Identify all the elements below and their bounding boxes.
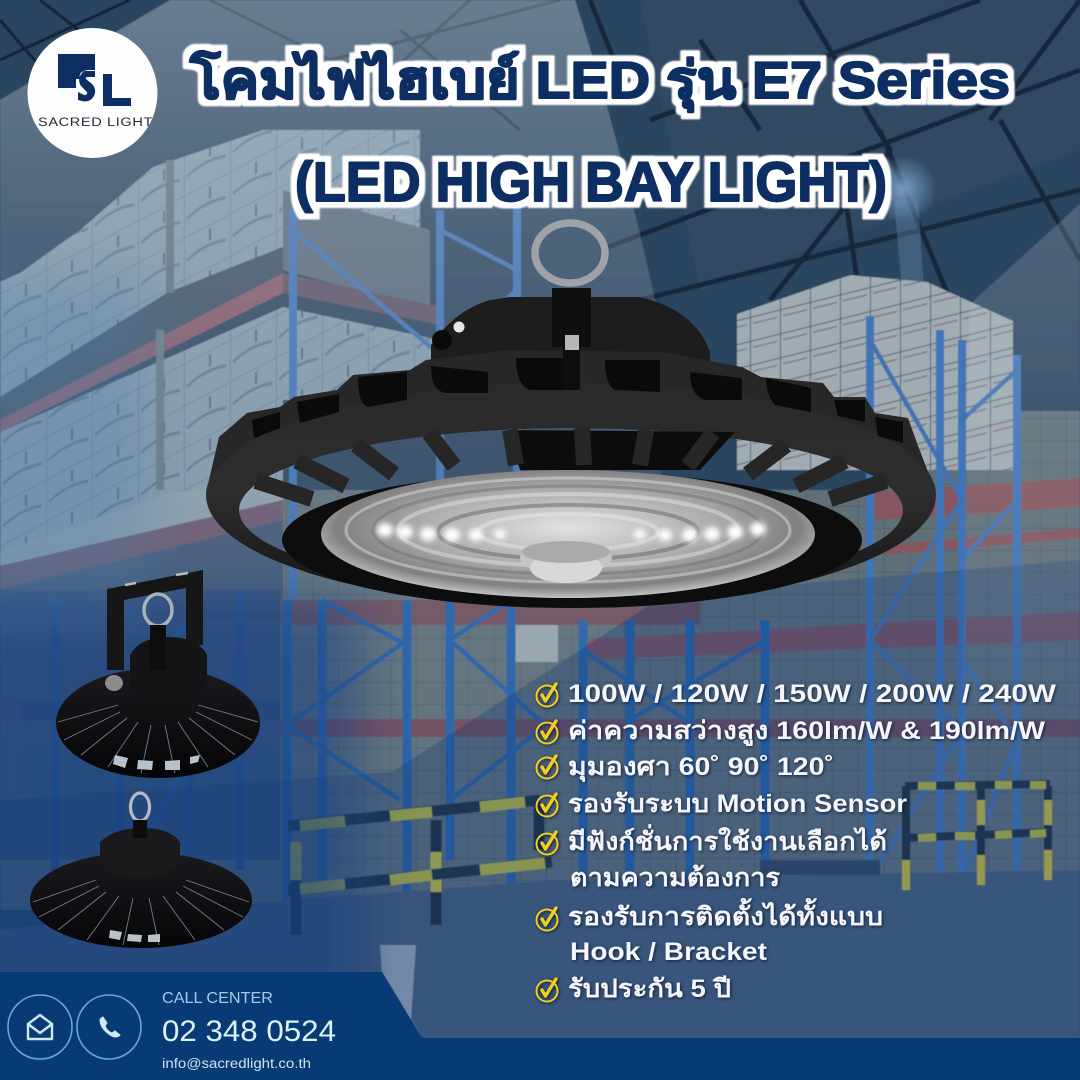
finned disc	[56, 668, 260, 778]
feature: dimming: ตามความต้องการ	[570, 864, 781, 892]
cooling fin lines	[33, 880, 249, 945]
blue rack uprights lower	[55, 590, 765, 930]
rim notches	[252, 358, 903, 443]
lower black housing	[282, 472, 862, 608]
ring band with see-through opening	[206, 383, 936, 607]
far rack back wall	[0, 490, 1080, 910]
logo wordmark: SACRED LIGHT	[38, 117, 153, 129]
stem	[150, 625, 166, 670]
icon: phone	[77, 995, 141, 1059]
finned disc	[30, 852, 252, 948]
feature: dimming: มีฟังก์ชั่นการใช้งานเลือกได้	[568, 824, 887, 856]
bottom highlights	[109, 930, 160, 942]
eye bolt ring	[535, 223, 605, 283]
main high bay lamp	[206, 223, 936, 608]
email: info@sacredlight.co.th	[162, 1056, 311, 1071]
right box stacks	[580, 275, 1080, 700]
translucent light overlay left	[0, 0, 665, 800]
feature: mounting: Hook / Bracket	[570, 938, 768, 966]
stem	[133, 820, 147, 838]
call center label: CALL CENTER	[162, 990, 273, 1007]
translucent light overlay right	[960, 204, 1080, 800]
title line 2: (LED HIGH BAY LIGHT)	[295, 150, 887, 213]
feature: mounting: รองรับการติดตั้งได้ทั้งแบบ	[568, 897, 883, 931]
driver body	[100, 828, 180, 878]
feature: mounting	[536, 897, 883, 966]
left box stacks	[0, 130, 440, 620]
lamp variant with hook	[30, 793, 252, 948]
title line 1: โคมไฟไฮเบย์ LED รุ่น E7 Series	[189, 49, 1010, 113]
blue rack uprights upper	[293, 200, 1017, 880]
lower left blue tint	[0, 600, 360, 1020]
dark blue tint below diagonal	[0, 560, 1080, 1040]
driver body	[130, 637, 207, 703]
eye ring	[144, 594, 172, 626]
bolt stem	[552, 288, 591, 390]
feature: wattage: 100W / 120W / 150W / 200W / 240W	[568, 680, 1056, 708]
toothed outer rim	[206, 350, 936, 510]
lens	[321, 470, 815, 598]
center cap	[520, 541, 612, 583]
dark floor machinery right	[760, 860, 880, 875]
safety barriers	[288, 784, 1050, 935]
driver housing	[431, 297, 710, 380]
phone number: 02 348 0524	[162, 1015, 336, 1048]
side bolt	[105, 675, 123, 691]
feature: efficacy: ค่าความสว่างสูง 160lm/W & 190lm/W	[568, 717, 1045, 747]
mid and lower shelf area	[0, 590, 1080, 860]
lamp variant with bracket	[56, 570, 260, 778]
icon: mail	[8, 995, 72, 1059]
rear windows	[508, 430, 735, 470]
lens rings	[346, 478, 790, 582]
feature: motion sensor: รองรับระบบ Motion Sensor	[568, 790, 907, 818]
logo badge	[28, 28, 158, 158]
eye ring	[130, 793, 150, 821]
feature list	[536, 680, 1056, 1003]
footer contact	[8, 990, 336, 1071]
bolt highlight	[565, 335, 579, 350]
feature: warranty: รับประกัน 5 ปี	[568, 975, 731, 1003]
ring spokes	[256, 428, 886, 499]
bottom highlights	[113, 755, 200, 770]
footer bar	[0, 972, 1080, 1080]
logo mark	[58, 54, 131, 106]
feature: beam angle: มุมองศา 60˚ 90˚ 120˚	[568, 753, 834, 783]
sensor	[432, 322, 464, 350]
left stack blue tint	[0, 280, 150, 620]
bracket	[107, 570, 203, 670]
bracket slots	[125, 573, 188, 585]
floor	[0, 870, 1080, 1040]
feature: dimming	[536, 824, 887, 892]
cooling fin lines	[58, 705, 258, 773]
LED highlights	[377, 522, 766, 542]
